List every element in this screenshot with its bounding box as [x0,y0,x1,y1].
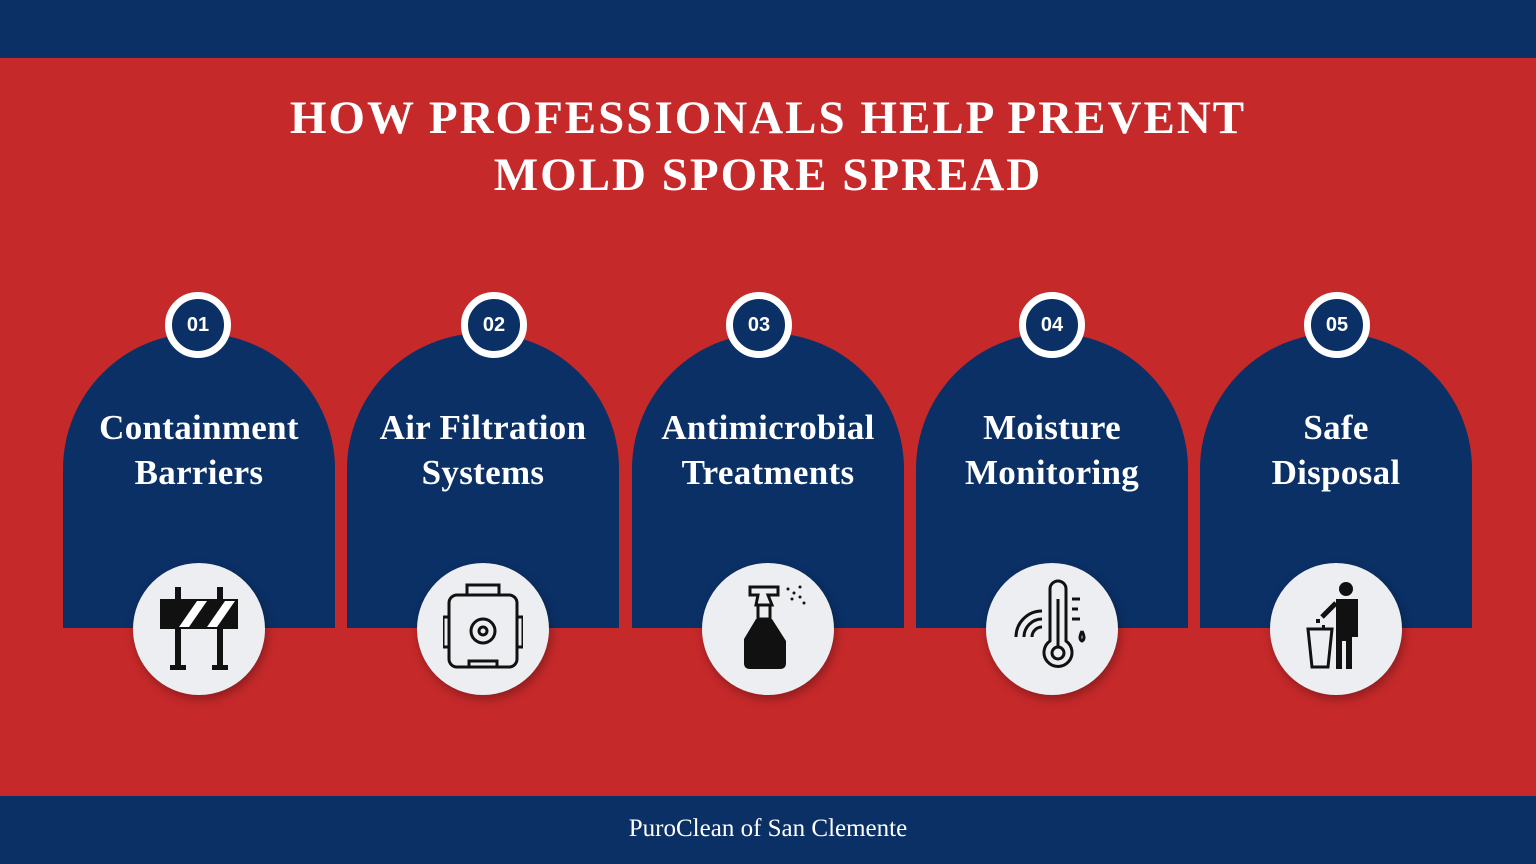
card 1: Barriers [135,453,263,492]
card 3: Treatments [682,453,854,492]
card 1 [63,333,335,628]
card 2: Air Filtration [380,408,586,447]
icon: barrier [133,563,265,695]
number 01 [165,292,231,358]
card 1: Containment [99,408,299,447]
number 02: 02 [483,314,505,336]
card 2 [347,333,619,628]
card 4: Moisture [983,408,1121,447]
card 4 [916,333,1188,628]
icon: disposal [1270,563,1402,695]
card 5 [1200,333,1472,628]
number 01: 01 [187,314,209,336]
icon: air filter [417,563,549,695]
footer text: PuroClean of San Clemente [629,815,907,842]
title [290,92,1246,201]
card 2: Systems [422,453,544,492]
number 05 [1304,292,1370,358]
title: MOLD SPORE SPREAD [494,149,1042,201]
card 3 [632,333,904,628]
number 05: 05 [1326,314,1348,336]
number 04: 04 [1041,314,1063,336]
card 5: Safe [1303,408,1369,447]
title: HOW PROFESSIONALS HELP PREVENT [290,92,1246,144]
number 03 [726,292,792,358]
card 3: Antimicrobial [661,408,875,447]
number 04 [1019,292,1085,358]
card 5: Disposal [1272,453,1400,492]
card 4: Monitoring [965,453,1139,492]
number 02 [461,292,527,358]
number 03: 03 [748,314,770,336]
icon: spray bottle [702,563,834,695]
icon: thermometer [986,563,1118,695]
